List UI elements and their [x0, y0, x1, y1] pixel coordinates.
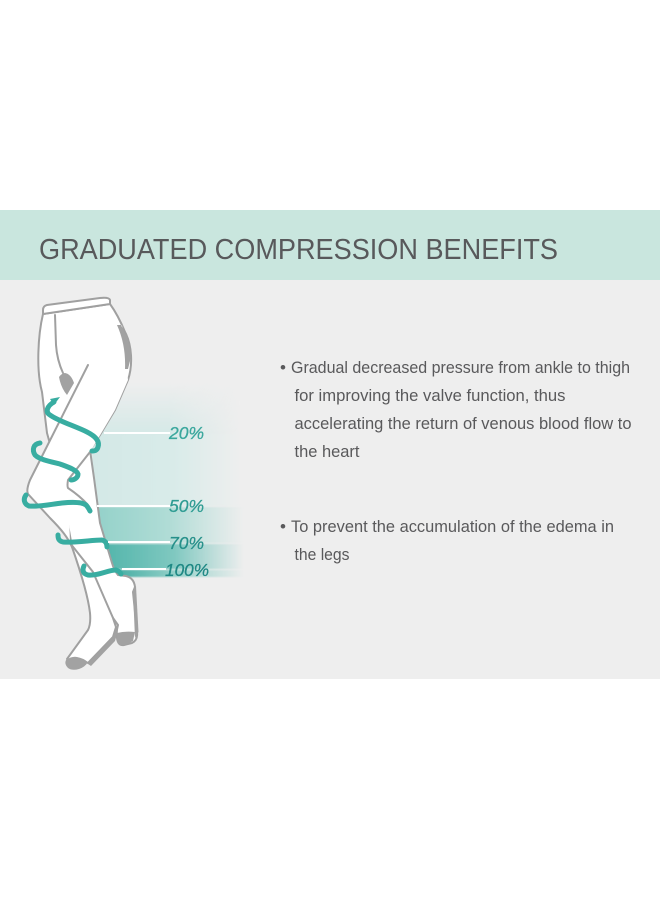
benefit 2 text	[280, 517, 614, 564]
front leg fill	[27, 325, 128, 663]
percentage labels: 100%	[165, 560, 209, 580]
benefit 1 text: for improving the valve function, thus	[294, 386, 566, 405]
front calf inner edge	[70, 543, 116, 663]
title: GRADUATED COMPRESSION BENEFITS	[39, 234, 558, 266]
spiral compression arrow	[24, 397, 121, 575]
benefit 2 text: To prevent the accumulation of the edema in	[291, 517, 614, 536]
crotch seam	[55, 315, 63, 373]
content panel	[0, 280, 660, 679]
benefit 2 text: •	[280, 517, 286, 536]
benefit 1 text: •	[280, 358, 286, 377]
percentage labels: 20%	[168, 423, 204, 443]
benefit 1 text	[280, 358, 632, 461]
benefit 1 text: Gradual decreased pressure from ankle to thigh	[291, 358, 630, 377]
benefit 1 text: accelerating the return of venous blood flow to	[294, 414, 632, 433]
percentage labels	[165, 423, 209, 580]
knee fold	[68, 452, 90, 510]
header band	[0, 210, 660, 280]
benefit 2 text: the legs	[294, 545, 350, 564]
gray hip, heel and toe patches	[59, 325, 138, 670]
front leg outer edge	[27, 365, 90, 659]
illustration: legs in stockings	[27, 298, 137, 663]
percentage labels: 50%	[169, 496, 204, 516]
leader lines	[97, 433, 170, 569]
benefit 1 text: the heart	[294, 442, 360, 461]
percentage labels: 70%	[169, 533, 204, 553]
arrow head	[50, 397, 60, 405]
waistband	[43, 298, 110, 314]
rear leg	[38, 304, 137, 645]
compression gradient bands	[92, 380, 244, 577]
